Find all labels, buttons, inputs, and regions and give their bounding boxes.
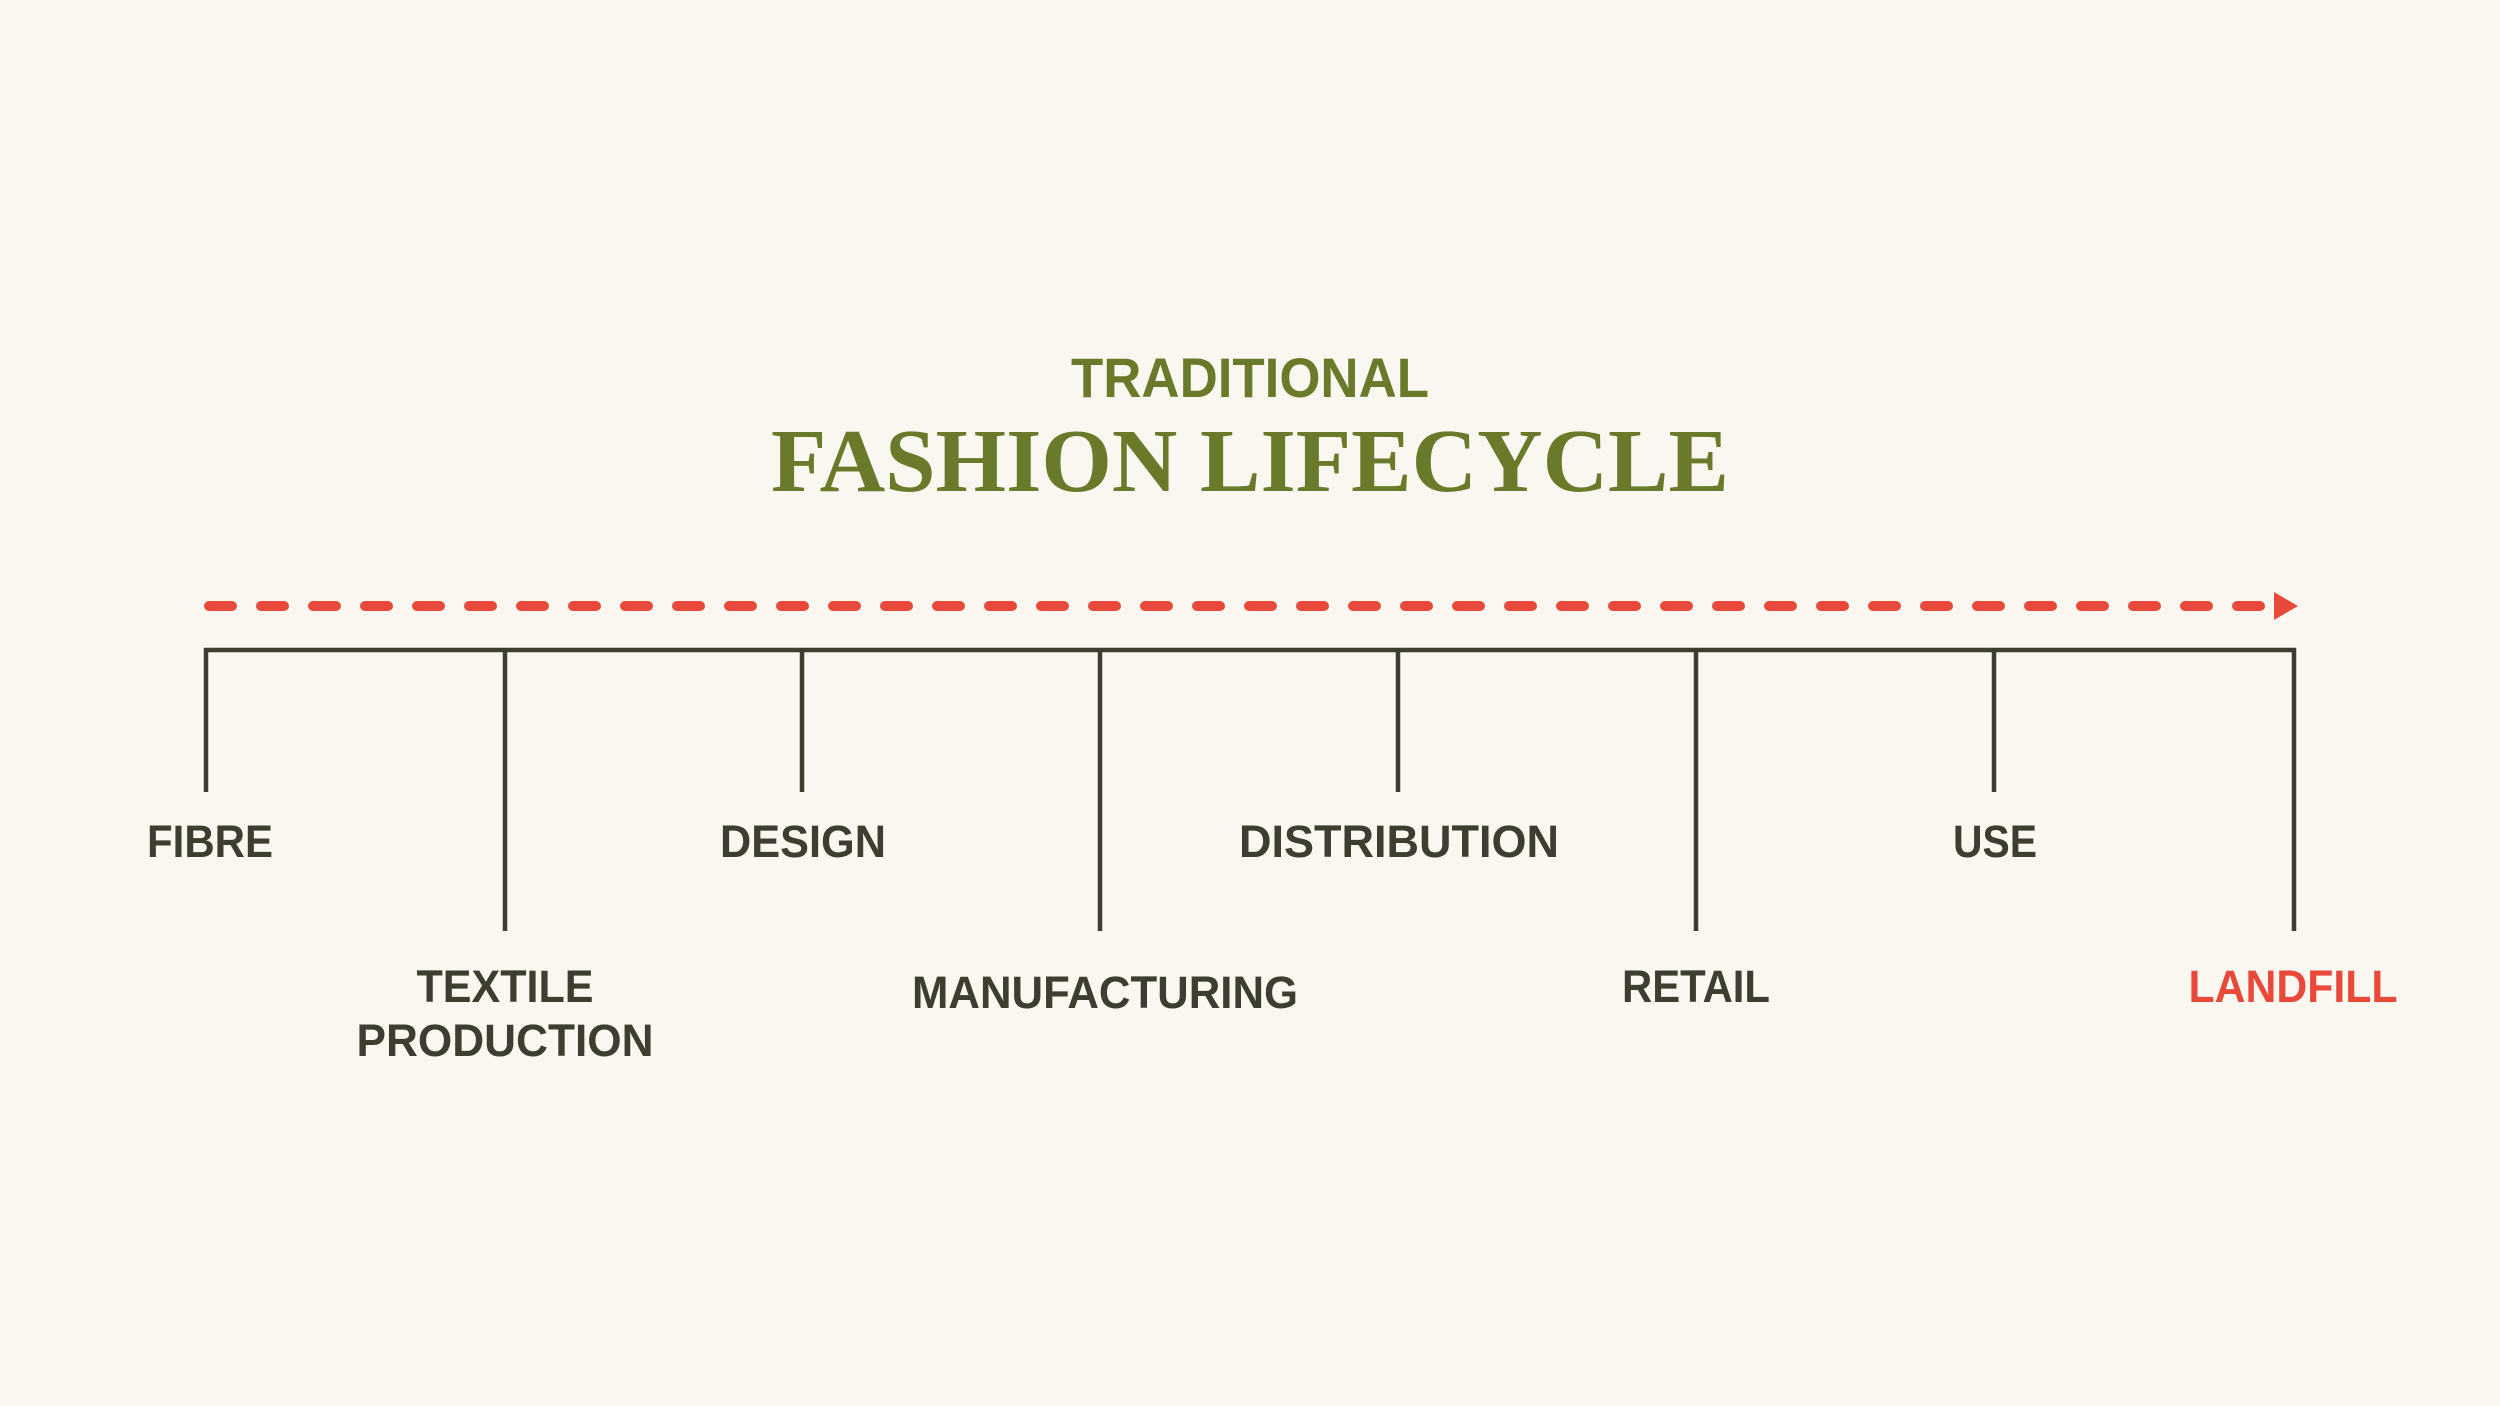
- subtitle: traditional: TRADITIONAL: [1071, 346, 1429, 409]
- label: distribution: DISTRIBUTION: [1239, 816, 1559, 867]
- label: textile production: [356, 961, 654, 1066]
- timeline: [206, 650, 2294, 931]
- heading: fashion lifecycle: FASHION LIFECYCLE: [771, 412, 1729, 511]
- label: textile production: TEXTILE: [416, 961, 594, 1012]
- label: use: USE: [1953, 816, 2037, 867]
- label: manufacturing: MANUFACTURING: [912, 967, 1298, 1018]
- label: landfill: LANDFILL: [2188, 961, 2398, 1012]
- label: retail: RETAIL: [1622, 961, 1770, 1012]
- label: textile production: PRODUCTION: [356, 1015, 654, 1066]
- label: fibre: FIBRE: [147, 816, 273, 867]
- label: design: DESIGN: [720, 816, 886, 867]
- title: [771, 346, 1729, 511]
- stage labels: [147, 816, 2398, 1066]
- arrow: dashed red direction: [209, 592, 2298, 620]
